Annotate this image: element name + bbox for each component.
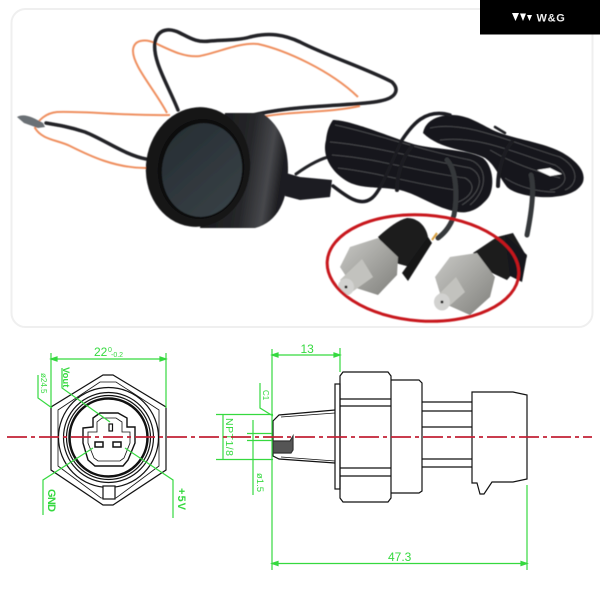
dimension 13: 13 — [300, 342, 314, 356]
ring terminal — [17, 115, 45, 128]
collar — [391, 380, 422, 493]
width dimension: 22 — [94, 345, 108, 359]
dimension 47.3: 47.3 — [388, 550, 412, 564]
front view dimensions — [38, 353, 173, 518]
diameter 1.5: ø1.5 — [254, 473, 265, 492]
side view labels — [223, 342, 412, 564]
terminals — [422, 402, 472, 467]
sensor right — [434, 233, 527, 315]
orange wires — [35, 41, 360, 168]
front view labels: 0 — [108, 347, 112, 354]
centre line — [7, 436, 592, 438]
+5V label: +5V — [175, 488, 187, 511]
brand name: W&G — [536, 12, 565, 24]
gauge — [138, 100, 332, 234]
Vout label: Vout — [60, 367, 71, 388]
logo badge — [480, 0, 600, 34]
front view drawing — [51, 375, 166, 505]
C1 label: C1 — [261, 390, 270, 401]
black wires — [46, 30, 396, 174]
photo panel — [12, 9, 592, 327]
cable loops and ties — [333, 113, 512, 202]
logo mark — [512, 13, 532, 21]
side view drawing — [273, 372, 527, 502]
diameter label: ø24.5 — [39, 373, 48, 394]
NPT1/8 label: NPT1/8 — [223, 418, 235, 456]
connector — [472, 392, 527, 494]
front view labels: -0.2 — [111, 352, 123, 359]
sensor cables — [438, 160, 533, 238]
product photo — [17, 30, 584, 328]
hex nut — [340, 372, 391, 502]
side view dimensions — [216, 348, 527, 570]
red highlight ellipse — [324, 208, 522, 328]
connector outline — [83, 413, 135, 466]
GND label: GND — [45, 489, 57, 512]
threaded tip — [273, 410, 335, 463]
front view labels — [39, 345, 187, 512]
cable coil: left bundle — [325, 120, 492, 212]
cable coil: right bundle — [423, 115, 584, 197]
sensor left — [338, 218, 437, 296]
flange — [335, 384, 340, 489]
